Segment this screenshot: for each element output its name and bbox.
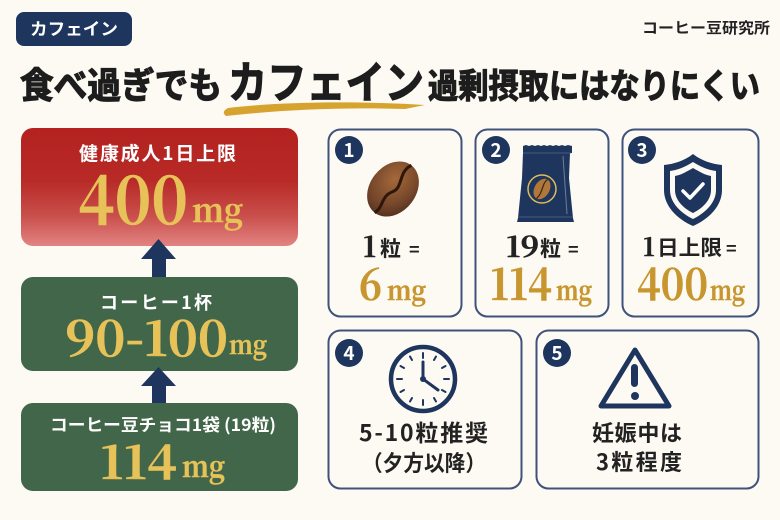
text: about 3 grains: 3粒程度: [596, 445, 682, 477]
value: 6mg: [359, 252, 426, 313]
value: 400mg: 400: [637, 252, 708, 313]
text: 1 grain: 1: [363, 226, 376, 266]
card 1: one bean: [328, 130, 462, 316]
title: [20, 47, 760, 111]
icon: shield: [664, 154, 722, 226]
title brush underline: [224, 102, 425, 116]
title: 食べ過ぎでも: [20, 57, 222, 109]
value: 114mg: mg: [556, 271, 592, 308]
text: 19 grains: 19: [506, 226, 539, 266]
text: 19 grains: 粒: [540, 233, 561, 263]
text: during pregnancy: 妊娠中は: [592, 416, 682, 448]
tag: カフェイン: カフェイン: [30, 15, 118, 40]
badge 2: [482, 136, 510, 164]
panel: daily limit: 400: [78, 149, 188, 243]
badge 3: 3: [636, 136, 648, 163]
panel: daily limit: [21, 128, 298, 246]
text: daily limit: 日上限: [657, 232, 722, 262]
badge 4: 4: [343, 339, 355, 366]
badge 5: 5: [551, 339, 563, 366]
text: 5-10 grains recommended: 5-10粒推奨: [359, 414, 488, 448]
text: evening onward: （夕方以降）: [362, 446, 486, 478]
value: 6mg: mg: [387, 271, 426, 308]
panel: coffee bean chocolate: [21, 403, 298, 493]
badge 3: [628, 136, 656, 164]
text: daily limit: 1: [643, 228, 655, 264]
brand label: コーヒー豆研究所: [642, 17, 770, 38]
text: daily limit: =: [726, 235, 737, 261]
badge 4: [335, 339, 363, 367]
panel: coffee bean chocolate: mg: [182, 445, 225, 486]
panel: daily limit: 健康成人1日上限: [79, 139, 236, 166]
panel: coffee cup: コーヒー1杯: [100, 289, 212, 315]
panel: coffee bean chocolate: コーヒー豆チョコ1袋 (19粒): [50, 411, 276, 436]
badge 2: 2: [490, 136, 502, 163]
card 2: bag: [476, 130, 608, 316]
icon: clock: [391, 347, 455, 411]
icon: coffee bean: [356, 151, 430, 227]
title: カフェイン: [228, 47, 424, 111]
panel: daily limit: mg: [192, 185, 243, 232]
text: 1 grain: [363, 226, 420, 266]
value: 114mg: [490, 252, 592, 313]
icon: coffee bag: [517, 145, 574, 222]
badge 1: 1: [343, 136, 355, 163]
panel: coffee cup: 90-100: [65, 301, 228, 370]
arrow: lower: [141, 367, 176, 403]
panel: coffee cup: [21, 277, 298, 371]
value: 6mg: 6: [359, 252, 382, 313]
text: 19 grains: [506, 226, 579, 266]
text: daily limit: [643, 228, 737, 264]
card 3: daily limit: [622, 130, 758, 316]
text: 19 grains: =: [568, 236, 579, 262]
value: 114mg: 114: [490, 252, 552, 313]
icon: warning: [601, 350, 669, 406]
badge 5: [543, 339, 571, 367]
panel: coffee bean chocolate: 114: [100, 427, 177, 493]
value: 400mg: mg: [710, 271, 745, 308]
text: 1 grain: 粒: [380, 233, 401, 263]
panel: coffee cup: mg: [229, 326, 267, 362]
card 4: recommendation: [328, 330, 522, 488]
arrow: upper: [141, 239, 176, 277]
card 5: pregnancy: [536, 330, 758, 488]
badge 1: [335, 136, 363, 164]
tag: カフェイン: [16, 12, 132, 46]
text: 1 grain: =: [409, 236, 420, 262]
